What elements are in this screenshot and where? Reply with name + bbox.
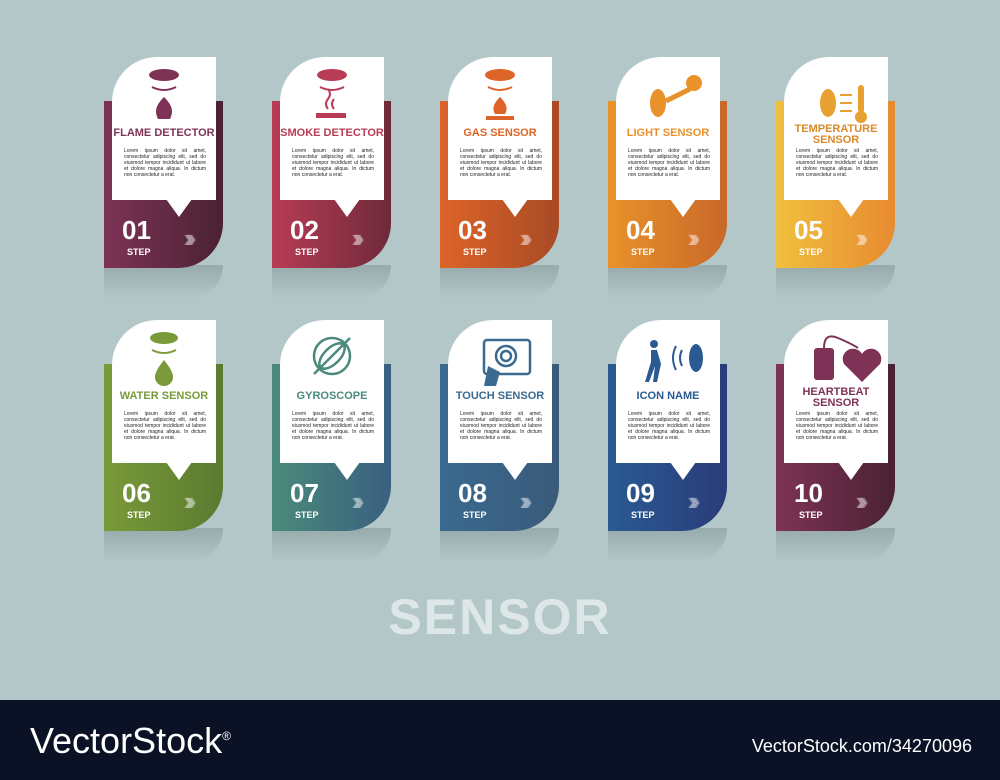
icon: gyroscope <box>312 336 352 376</box>
card 09: icon name: STEP <box>631 510 655 520</box>
title <box>802 386 870 409</box>
text: Lorem ipsum dolor sit amet, consectetur adipiscing elit, sed do eiusmod tempor incididunt ut labore et dolore magna aliqua. In dictum non consectetur a erat. <box>628 411 710 441</box>
title: GAS SENSOR <box>463 127 537 139</box>
icon: heartbeat <box>814 335 882 382</box>
icon: flame detector <box>149 69 179 119</box>
card 09: icon name <box>608 320 727 552</box>
text: Lorem ipsum dolor sit amet, consectetur adipiscing elit, sed do eiusmod tempor incididunt ut labore et dolore magna aliqua. In dictum non consectetur a erat. <box>124 148 206 178</box>
footer band: VectorStock.com/34270096 <box>752 736 972 756</box>
card 02: smoke detector <box>272 57 391 289</box>
step number: 03 <box>458 215 487 245</box>
main title: SENSOR <box>388 589 612 645</box>
text: Lorem ipsum dolor sit amet, consectetur adipiscing elit, sed do eiusmod tempor incididunt ut labore et dolore magna aliqua. In dictum non consectetur a erat. <box>628 148 710 178</box>
icon: light sensor <box>650 75 702 117</box>
card 01: flame detector <box>104 57 223 289</box>
icon: touch <box>482 338 532 386</box>
card 08: touch sensor <box>440 320 559 552</box>
title: HEARTBEAT <box>802 386 870 398</box>
text: Lorem ipsum dolor sit amet, consectetur adipiscing elit, sed do eiusmod tempor incididunt ut labore et dolore magna aliqua. In dictum non consectetur a erat. <box>460 148 542 178</box>
title: LIGHT SENSOR <box>627 127 709 139</box>
text: Lorem ipsum dolor sit amet, consectetur adipiscing elit, sed do eiusmod tempor incididunt ut labore et dolore magna aliqua. In dictum non consectetur a erat. <box>460 411 542 441</box>
card 07: gyroscope: STEP <box>295 510 319 520</box>
title: ICON NAME <box>637 390 699 402</box>
card 07: gyroscope <box>272 320 391 552</box>
text: Lorem ipsum dolor sit amet, consectetur adipiscing elit, sed do eiusmod tempor incididunt ut labore et dolore magna aliqua. In dictum non consectetur a erat. <box>796 148 878 178</box>
icon: motion <box>645 340 703 382</box>
step number: 10 <box>794 478 823 508</box>
step number: 05 <box>794 215 823 245</box>
card 03: gas sensor: STEP <box>463 247 487 257</box>
card 06: water sensor: STEP <box>127 510 151 520</box>
title: FLAME DETECTOR <box>113 127 215 139</box>
step number: 07 <box>290 478 319 508</box>
card 01: flame detector: STEP <box>127 247 151 257</box>
step number: 09 <box>626 478 655 508</box>
icon: gas <box>485 69 515 120</box>
title: SENSOR <box>813 134 859 146</box>
card 03: gas sensor <box>440 57 559 289</box>
step number: 08 <box>458 478 487 508</box>
card 02: smoke detector: STEP <box>295 247 319 257</box>
card 08: touch sensor: STEP <box>463 510 487 520</box>
card 06: water sensor <box>104 320 223 552</box>
card 10: heartbeat sensor: STEP <box>799 510 823 520</box>
footer band <box>0 700 1000 780</box>
step number: 06 <box>122 478 151 508</box>
text: Lorem ipsum dolor sit amet, consectetur adipiscing elit, sed do eiusmod tempor incididunt ut labore et dolore magna aliqua. In dictum non consectetur a erat. <box>292 411 374 441</box>
icon: temperature <box>820 85 867 123</box>
card 10: heartbeat sensor <box>776 320 895 552</box>
title <box>794 123 878 146</box>
step number: 01 <box>122 215 151 245</box>
step number: 02 <box>290 215 319 245</box>
card 05: temperature sensor: STEP <box>799 247 823 257</box>
card 04: light sensor <box>608 57 727 289</box>
title: TOUCH SENSOR <box>456 390 544 402</box>
title: GYROSCOPE <box>297 390 367 402</box>
title: TEMPERATURE <box>795 123 877 135</box>
text: Lorem ipsum dolor sit amet, consectetur adipiscing elit, sed do eiusmod tempor incididunt ut labore et dolore magna aliqua. In dictum non consectetur a erat. <box>796 411 878 441</box>
title: WATER SENSOR <box>120 390 208 402</box>
icon: smoke detector <box>316 69 347 118</box>
text: Lorem ipsum dolor sit amet, consectetur adipiscing elit, sed do eiusmod tempor incididunt ut labore et dolore magna aliqua. In dictum non consectetur a erat. <box>292 148 374 178</box>
title: SENSOR <box>813 397 859 409</box>
card 04: light sensor: STEP <box>631 247 655 257</box>
icon: water <box>150 332 178 386</box>
step number: 04 <box>626 215 655 245</box>
footer band: VectorStock® <box>30 720 231 761</box>
text: Lorem ipsum dolor sit amet, consectetur adipiscing elit, sed do eiusmod tempor incididunt ut labore et dolore magna aliqua. In dictum non consectetur a erat. <box>124 411 206 441</box>
title: SMOKE DETECTOR <box>280 127 384 139</box>
card 05: temperature sensor <box>776 57 895 289</box>
